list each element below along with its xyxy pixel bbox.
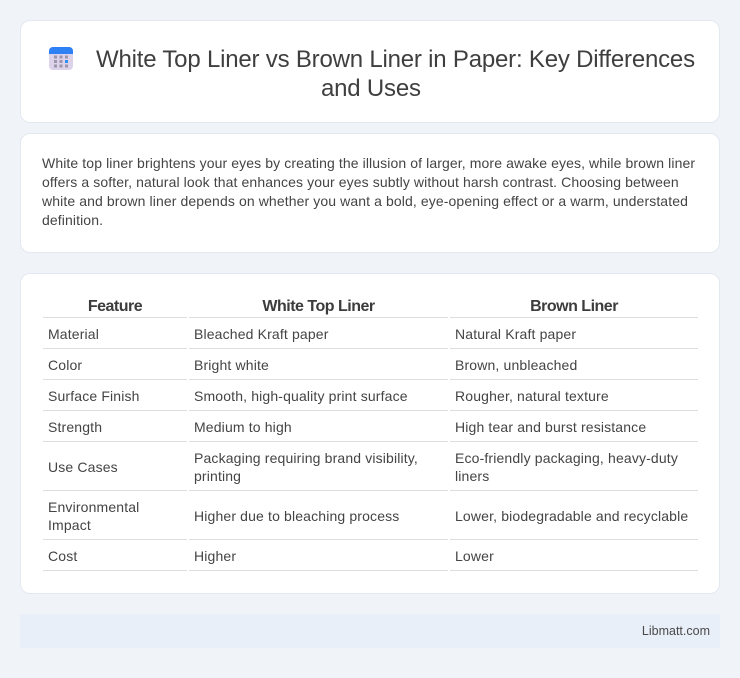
table header: White Top Liner	[262, 298, 375, 315]
title	[96, 46, 695, 102]
row: environmental impact: Lower, biodegradable and recyclable	[455, 508, 688, 524]
icon: calendar	[49, 47, 73, 70]
row: color: Brown, unbleached	[455, 357, 577, 373]
row: material	[43, 326, 698, 349]
row: color	[43, 357, 698, 380]
comparison table	[43, 298, 698, 571]
intro text	[42, 155, 695, 228]
row: cost: Higher	[194, 548, 236, 564]
row: use cases	[43, 450, 698, 491]
row: use cases: Use Cases	[48, 459, 118, 475]
title: White Top Liner vs Brown Liner in Paper: Key Differences	[96, 46, 695, 73]
row: environmental impact: Impact	[48, 517, 91, 533]
intro text: definition.	[42, 212, 103, 228]
row: surface finish: Smooth, high-quality print surface	[194, 388, 408, 404]
intro text: White top liner brightens your eyes by creating the illusion of larger, more awake eyes, while brown liner	[42, 155, 695, 171]
row: environmental impact	[43, 499, 698, 540]
title: and Uses	[321, 75, 421, 102]
footer text: Libmatt.com	[642, 624, 710, 638]
intro text: white and brown liner depends on whether you want a bold, eye-opening effect or a warm, understated	[42, 193, 688, 209]
row: surface finish: Rougher, natural texture	[455, 388, 609, 404]
row: color: Bright white	[194, 357, 269, 373]
table header: Feature	[88, 298, 142, 315]
row: material: Bleached Kraft paper	[194, 326, 329, 342]
row: material: Material	[48, 326, 99, 342]
row: strength: High tear and burst resistance	[455, 419, 646, 435]
table header: Brown Liner	[530, 298, 618, 315]
row: material: Natural Kraft paper	[455, 326, 576, 342]
footer bar	[20, 614, 720, 648]
row: surface finish	[43, 388, 698, 411]
row: strength: Strength	[48, 419, 102, 435]
row: color: Color	[48, 357, 82, 373]
row: cost	[43, 548, 698, 571]
row: surface finish: Surface Finish	[48, 388, 140, 404]
row: cost: Lower	[455, 548, 494, 564]
row: strength	[43, 419, 698, 442]
row: use cases: Packaging requiring brand visibility,	[194, 450, 418, 466]
row: cost: Cost	[48, 548, 77, 564]
row: strength: Medium to high	[194, 419, 292, 435]
row: use cases: liners	[455, 468, 489, 484]
row: environmental impact: Environmental	[48, 499, 139, 515]
row: use cases: printing	[194, 468, 241, 484]
header panel	[20, 20, 720, 123]
row: environmental impact: Higher due to bleaching process	[194, 508, 399, 524]
intro text: offers a softer, natural look that enhances your eyes subtly without harsh contrast. Choosing between	[42, 174, 679, 190]
row: use cases: Eco-friendly packaging, heavy-duty	[455, 450, 678, 466]
table header	[43, 298, 698, 318]
comparison table panel	[20, 273, 720, 594]
intro panel	[20, 133, 720, 253]
